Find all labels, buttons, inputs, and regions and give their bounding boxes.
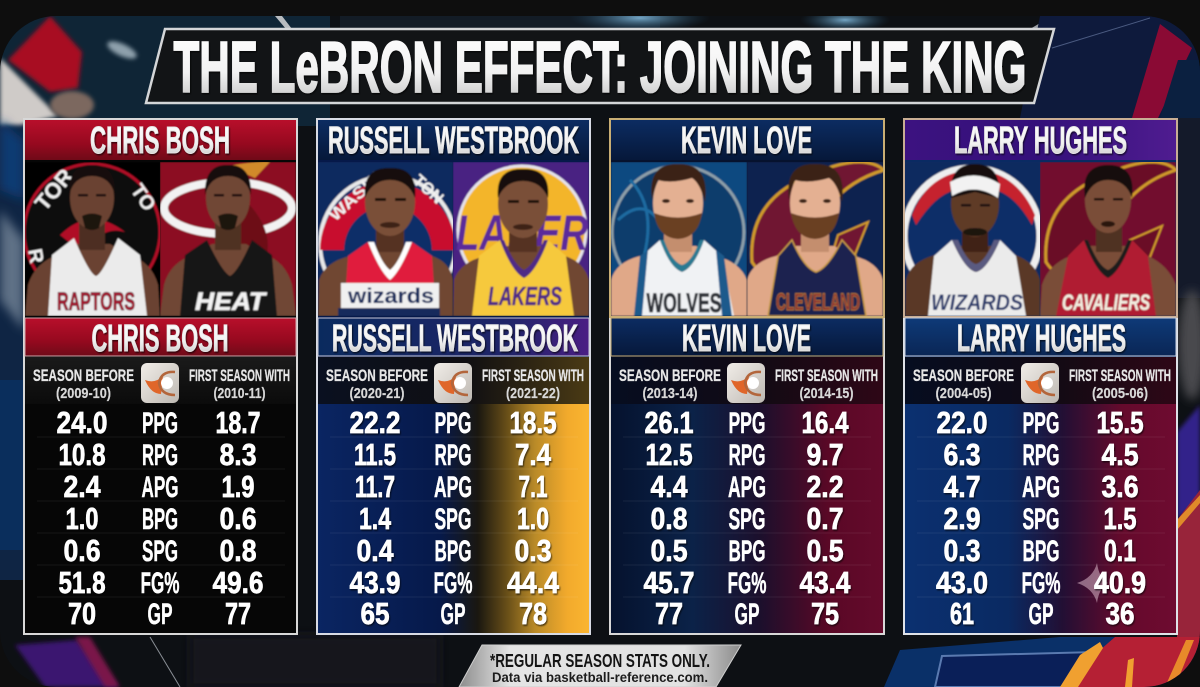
photo: Westbrook with Lakers: LAKER — [456, 205, 588, 261]
stat table: Russell Westbrook: 11.5 — [354, 437, 396, 472]
photo: Westbrook with Lakers — [453, 162, 589, 316]
season headers: SEASON BEFORE — [619, 366, 721, 385]
season headers — [611, 357, 883, 404]
icon: site logo — [434, 363, 472, 403]
season headers — [905, 357, 1176, 404]
icon: site logo — [141, 363, 179, 403]
stat table: Larry Hughes: 36 — [1106, 596, 1134, 631]
photo: Hughes with Cavaliers — [1040, 162, 1176, 316]
photo: Love with Timberwolves — [611, 162, 747, 318]
stat table: Chris Bosh: PPG — [142, 407, 178, 440]
stat table: Kevin Love: 0.5 — [806, 533, 844, 568]
stat table: Russell Westbrook: SPG — [434, 503, 472, 536]
stat table: Kevin Love — [611, 404, 883, 633]
season headers: (2021-22) — [506, 385, 560, 402]
stat table: Kevin Love: 4.4 — [650, 469, 688, 504]
stat table: Russell Westbrook: 18.5 — [510, 405, 556, 440]
header: Russell Westbrook — [318, 120, 589, 162]
stat table: Russell Westbrook — [318, 404, 589, 633]
stat table: Russell Westbrook: 0.4 — [356, 533, 394, 568]
header: Russell Westbrook: RUSSELL WESTBROOK — [328, 120, 579, 162]
stat table: Kevin Love: 0.7 — [806, 501, 844, 536]
stat table: Russell Westbrook: 22.2 — [350, 405, 400, 440]
icon: site logo — [1021, 363, 1059, 403]
photo: Hughes with Wizards — [904, 162, 1040, 316]
photo: Bosh with Raptors: R — [23, 247, 47, 266]
stat table: Larry Hughes: 4.7 — [944, 469, 980, 504]
stat table: Russell Westbrook: BPG — [434, 535, 472, 568]
stat table: Russell Westbrook: 1.0 — [517, 501, 549, 536]
season headers: SEASON BEFORE — [33, 366, 134, 385]
name bar: Kevin Love: KEVIN LOVE — [682, 318, 811, 360]
stat table: Kevin Love: 0.5 — [650, 533, 688, 568]
stat table: Russell Westbrook: 7.4 — [515, 437, 552, 472]
stat table: Larry Hughes: 1.5 — [1104, 501, 1136, 536]
stat table: Kevin Love: 26.1 — [644, 405, 694, 440]
stat table: Larry Hughes: GP — [1028, 598, 1054, 631]
stat table: Kevin Love: SPG — [728, 503, 766, 536]
season headers: SEASON BEFORE — [913, 366, 1014, 385]
stat table: Russell Westbrook: FG% — [434, 567, 472, 600]
stat table: Larry Hughes: 43.0 — [936, 565, 988, 600]
season headers — [318, 357, 589, 404]
season headers: (2004-05) — [936, 385, 992, 402]
stat table: Larry Hughes: SPG — [1022, 503, 1060, 536]
stat table: Russell Westbrook: GP — [440, 598, 466, 631]
panel: Chris Bosh — [23, 119, 297, 634]
season headers: (2009-10) — [56, 385, 111, 402]
stat table: Chris Bosh: 1.0 — [66, 501, 98, 536]
stat table: Russell Westbrook: APG — [434, 471, 472, 504]
stat table: Larry Hughes: 2.9 — [944, 501, 980, 536]
stat table: Russell Westbrook: 65 — [360, 596, 390, 631]
photo: Hughes with Cavaliers: CAVALIERS — [1062, 290, 1150, 315]
stat table: Larry Hughes: 3.6 — [1102, 469, 1138, 504]
stat table: Kevin Love: 45.7 — [644, 565, 694, 600]
stat table: Larry Hughes: 40.9 — [1094, 565, 1146, 600]
stat table: Larry Hughes: 15.5 — [1096, 405, 1144, 440]
photo: Westbrook with Wizards: TON — [409, 171, 447, 208]
stat table: Larry Hughes: 4.5 — [1102, 437, 1138, 472]
stat table: Chris Bosh: 18.7 — [216, 405, 260, 440]
panel: Russell Westbrook — [317, 119, 590, 634]
photo: Bosh with Heat: HEAT — [195, 288, 268, 316]
stat table: Kevin Love: RPG — [728, 439, 766, 472]
stat table: Chris Bosh: 8.3 — [220, 437, 256, 472]
stat table: Chris Bosh: RPG — [142, 439, 178, 472]
panel: Kevin Love — [610, 119, 884, 634]
stat table: Kevin Love: 75 — [811, 596, 839, 631]
stat table: Chris Bosh: 0.8 — [220, 533, 256, 568]
photo: Westbrook with Wizards: WASHI — [325, 168, 385, 225]
stat table: Kevin Love: PPG — [728, 407, 766, 440]
season headers: (2020-21) — [350, 385, 404, 402]
stat table: Kevin Love: 43.4 — [800, 565, 851, 600]
stat table: Kevin Love: 2.2 — [806, 469, 844, 504]
name bar: Chris Bosh — [25, 318, 296, 360]
stat table: Larry Hughes: 6.3 — [944, 437, 980, 472]
stat table: Chris Bosh: 77 — [225, 596, 251, 631]
photo: Bosh with Raptors: RAPTORS — [57, 288, 135, 316]
name bar: Chris Bosh: CHRIS BOSH — [92, 318, 228, 360]
season headers: (2010-11) — [214, 385, 266, 402]
photo: Bosh with Raptors: TOR — [30, 164, 78, 215]
header: Kevin Love — [611, 120, 883, 162]
footnote: data source: Data via basketball-reference.com. — [492, 669, 708, 685]
stat table: Chris Bosh: APG — [142, 471, 178, 504]
stat table: Larry Hughes: BPG — [1022, 535, 1060, 568]
stat table: Russell Westbrook: 78 — [519, 596, 547, 631]
stat table: Russell Westbrook: 7.1 — [518, 469, 548, 504]
photo: Westbrook with Wizards: wizards — [347, 285, 434, 308]
stat table: Chris Bosh: FG% — [140, 567, 180, 600]
footnote plate — [459, 645, 741, 687]
icon: sparkle watermark — [1077, 563, 1108, 603]
stat table: Russell Westbrook: 11.7 — [355, 469, 395, 504]
stat table: Larry Hughes: 0.3 — [944, 533, 980, 568]
stat table: Chris Bosh: 51.8 — [58, 565, 106, 600]
name bar: Russell Westbrook — [318, 318, 589, 360]
stat table: Kevin Love: 77 — [655, 596, 683, 631]
stat table: Larry Hughes: PPG — [1022, 407, 1060, 440]
stat table: Larry Hughes — [905, 404, 1176, 633]
stat table: Larry Hughes: 22.0 — [936, 405, 988, 440]
stat table: Chris Bosh: 70 — [68, 596, 96, 631]
stat table: Kevin Love: 16.4 — [802, 405, 849, 440]
stat table: Larry Hughes: APG — [1022, 471, 1060, 504]
stat table: Chris Bosh: GP — [148, 598, 172, 631]
photo: Bosh with Raptors — [23, 162, 160, 316]
season headers: FIRST SEASON WITH — [189, 366, 290, 385]
header: Kevin Love: KEVIN LOVE — [681, 120, 812, 162]
stat table: Kevin Love: GP — [734, 598, 760, 631]
photo: Bosh with Raptors: TO — [126, 180, 160, 215]
season headers: (2013-14) — [642, 385, 698, 402]
stat table: Kevin Love: 0.8 — [650, 501, 688, 536]
stat table: Chris Bosh: 2.4 — [64, 469, 101, 504]
stat table: Larry Hughes: 61 — [950, 596, 974, 631]
photo: Westbrook with Lakers: LAKERS — [488, 281, 562, 311]
stat table: Russell Westbrook: 44.4 — [507, 565, 560, 600]
stat table: Kevin Love: 12.5 — [646, 437, 692, 472]
header: Chris Bosh: CHRIS BOSH — [90, 120, 230, 162]
stat table: Chris Bosh: 0.6 — [220, 501, 256, 536]
header: Chris Bosh — [25, 120, 296, 162]
stat table: Kevin Love: 9.7 — [806, 437, 844, 472]
stat table: Larry Hughes: FG% — [1022, 567, 1060, 600]
season headers: FIRST SEASON WITH — [482, 366, 584, 385]
stat table: Kevin Love: BPG — [728, 535, 766, 568]
photo: Hughes with Wizards: WIZARDS — [931, 290, 1023, 315]
stat table: Kevin Love: APG — [728, 471, 766, 504]
footnote: regular season only: *REGULAR SEASON STATS ONLY. — [490, 651, 710, 671]
stat table: Chris Bosh — [37, 405, 285, 631]
stat table: Chris Bosh: 24.0 — [56, 405, 108, 440]
stat table: Chris Bosh: 10.8 — [58, 437, 106, 472]
stat table: Chris Bosh: 1.9 — [222, 469, 254, 504]
stat table: Russell Westbrook: RPG — [434, 439, 472, 472]
season headers — [25, 357, 296, 404]
season headers: SEASON BEFORE — [326, 366, 428, 385]
stat table: Russell Westbrook: 1.4 — [359, 501, 392, 536]
photo: Love with Cavaliers: CLEVELAND — [776, 289, 860, 316]
season headers: (2014-15) — [800, 385, 854, 402]
season headers: (2005-06) — [1092, 385, 1148, 402]
photo: Love with Cavaliers — [747, 162, 884, 316]
stat table: Larry Hughes: 0.1 — [1104, 533, 1136, 568]
stat table: Larry Hughes: RPG — [1022, 439, 1060, 472]
stat table: Kevin Love: FG% — [728, 567, 766, 600]
name bar: Kevin Love — [611, 318, 883, 360]
name bar: Russell Westbrook: RUSSELL WESTBROOK — [332, 318, 578, 360]
panel: Larry Hughes — [904, 119, 1177, 634]
photo: Love with Timberwolves: WOLVES — [646, 288, 722, 318]
season headers: FIRST SEASON WITH — [775, 366, 878, 385]
stat table: Russell Westbrook: 43.9 — [350, 565, 400, 600]
photo: Bosh with Heat — [160, 162, 296, 316]
icon: site logo — [727, 363, 765, 403]
stat table: Russell Westbrook: 0.3 — [514, 533, 552, 568]
stat table: Chris Bosh: 49.6 — [212, 565, 264, 600]
stat table: Russell Westbrook: PPG — [434, 407, 472, 440]
stat table: Chris Bosh: SPG — [142, 535, 178, 568]
stat table: Chris Bosh: BPG — [142, 503, 178, 536]
photo: Westbrook with Wizards — [318, 162, 456, 316]
stat table: Chris Bosh: 0.6 — [64, 533, 100, 568]
title banner — [146, 28, 1054, 108]
